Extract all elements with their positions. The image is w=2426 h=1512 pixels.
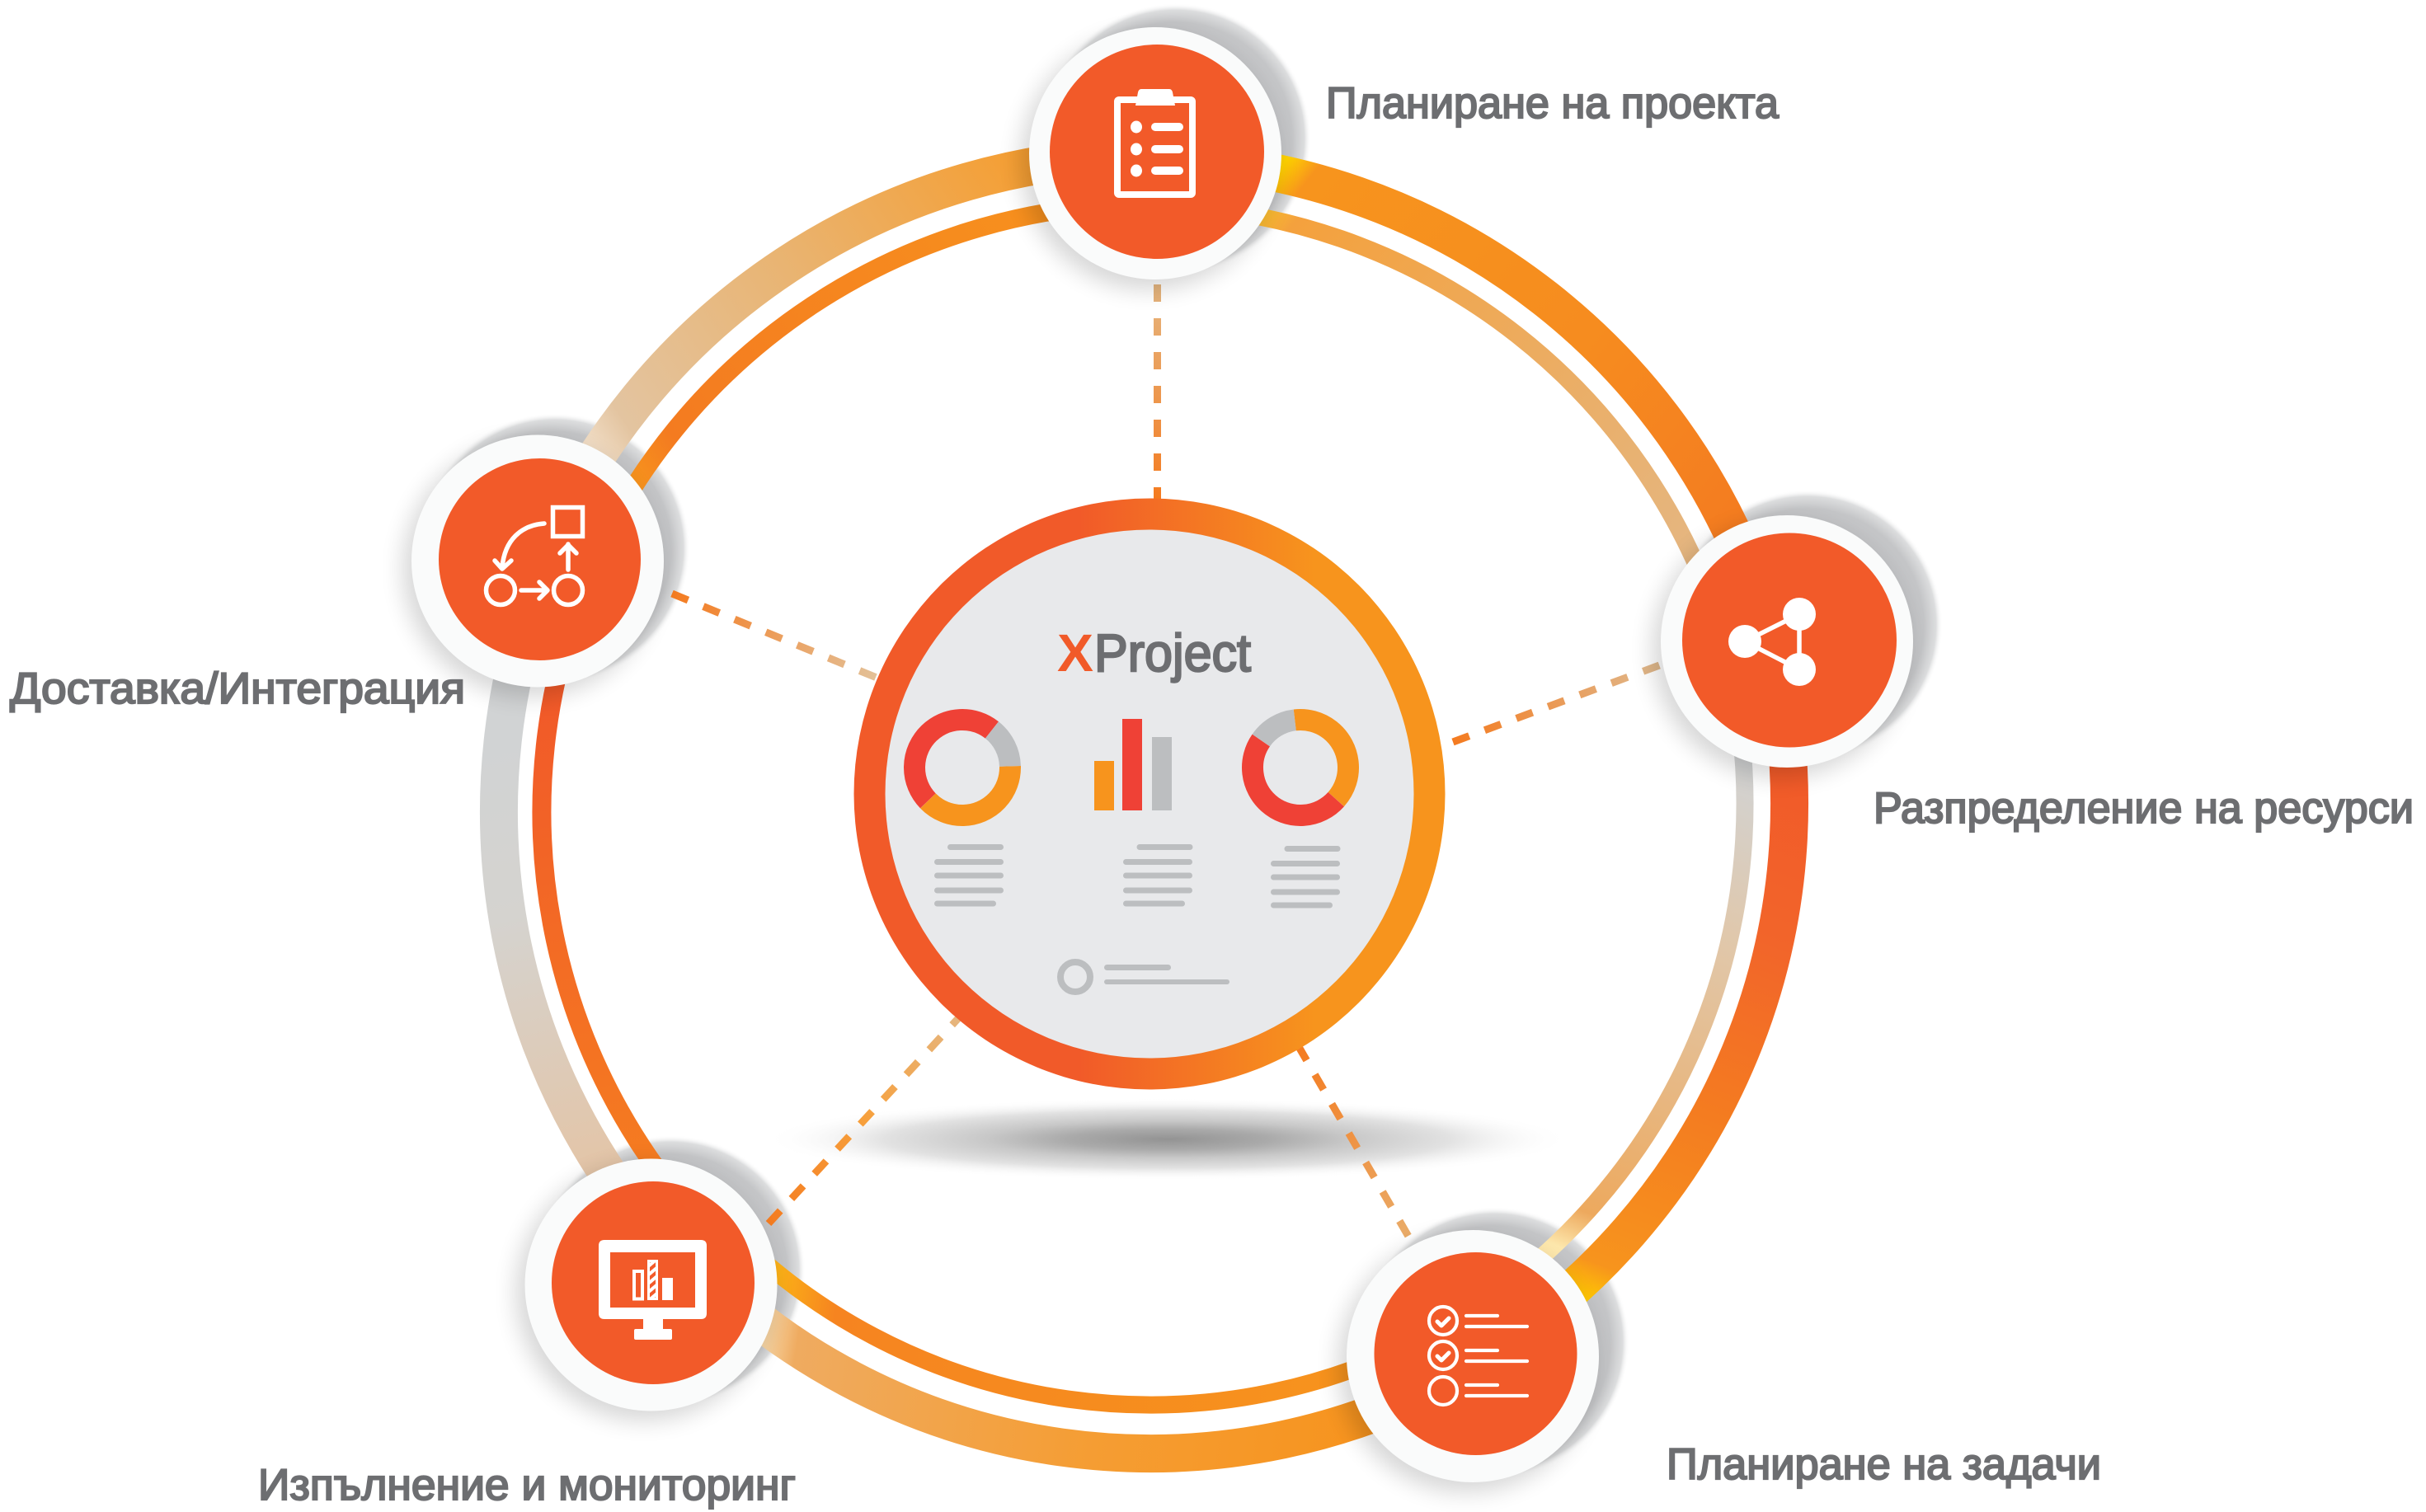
- node shadows: grey crescents: [420, 3, 1943, 1477]
- arc: project planning to resources: [1154, 159, 1774, 657]
- node: task planning: [1338, 1230, 1599, 1492]
- label: project planning: Планиране на проекта: [1326, 79, 1780, 128]
- icon: share network: [1728, 598, 1816, 686]
- node: delivery and integration: [403, 435, 664, 697]
- node: execution and monitoring: [516, 1159, 777, 1420]
- XProject logo: Project: [1094, 623, 1251, 683]
- text placeholder lines right: [1271, 846, 1341, 909]
- arc: resources to task planning: [1453, 646, 1789, 1361]
- arc: task planning to monitoring: [684, 1219, 1478, 1453]
- icon: workflow: [487, 508, 582, 605]
- XProject logo: X: [1057, 623, 1093, 683]
- icon: clipboard: [1117, 89, 1192, 195]
- label: delivery and integration: Доставка/Интеграция: [10, 664, 465, 713]
- footer ring and lines: [1060, 962, 1229, 992]
- icon: checklist: [1429, 1307, 1527, 1405]
- arc: monitoring to delivery: [499, 565, 708, 1260]
- node: resource allocation: [1653, 515, 1913, 777]
- arc: delivery to project planning: [541, 156, 1155, 580]
- text placeholder lines centre: [1123, 844, 1192, 907]
- text placeholder lines left: [934, 844, 1004, 907]
- node: project planning: [1021, 27, 1281, 289]
- donut chart right: [1233, 700, 1368, 835]
- label: resource allocation: Разпределение на ресурси: [1874, 784, 2414, 833]
- floor shadow under central dashboard: [764, 1098, 1572, 1181]
- donut chart left: [895, 700, 1030, 835]
- dashed connectors from nodes to centre: [672, 284, 1662, 1245]
- icon: monitor with bars: [599, 1240, 707, 1340]
- central dashboard circle: [854, 498, 1445, 1090]
- bar chart: [1094, 719, 1172, 810]
- label: execution and monitoring: Изпълнение и мониторинг: [258, 1461, 796, 1510]
- label: task planning: Планиране на задачи: [1667, 1440, 2101, 1489]
